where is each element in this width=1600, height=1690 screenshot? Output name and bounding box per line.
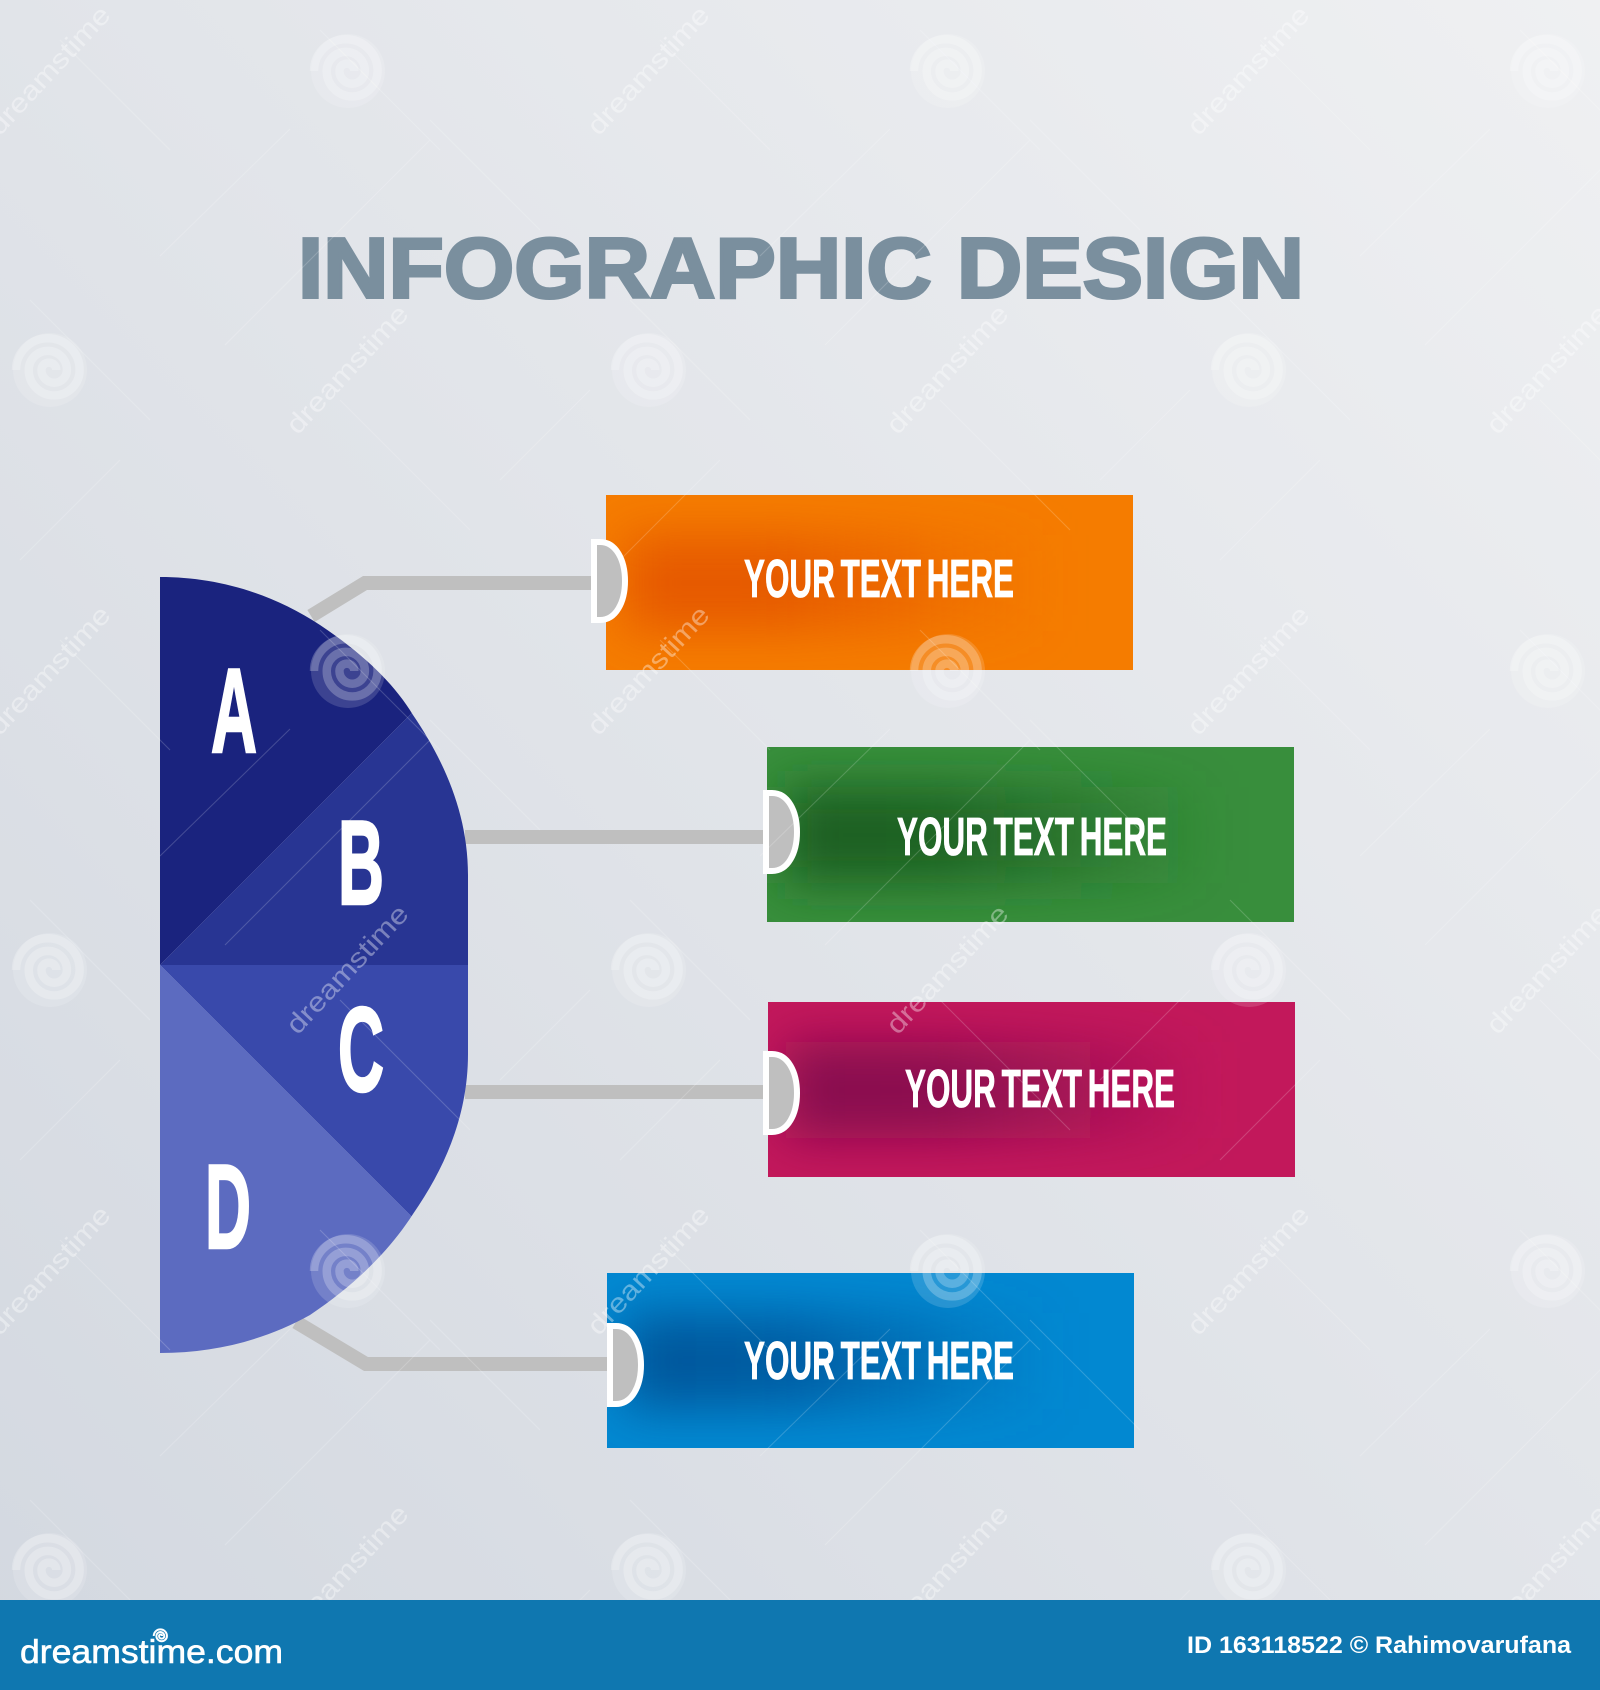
watermark overlay: dreamstime: [280, 899, 415, 1040]
watermark overlay: dreamstime: [880, 899, 1015, 1040]
watermark overlay: dreamstime: [581, 0, 716, 141]
watermark overlay: dreamstime: [1181, 600, 1316, 741]
panel: orange box: [606, 495, 1133, 670]
label text: YOUR TEXT HERE: [905, 1059, 1175, 1119]
icon: footer logo spiral: [154, 1629, 167, 1641]
letter A: A: [211, 644, 257, 778]
label text: YOUR TEXT HERE: [897, 807, 1167, 867]
label text: YOUR TEXT HERE: [744, 549, 1014, 609]
connector: D to blue box: [296, 1322, 620, 1364]
footer band: [0, 1600, 1600, 1690]
label text: YOUR TEXT HERE: [744, 1331, 1014, 1391]
panel: green box: [767, 747, 1294, 922]
connector: A to orange box: [311, 583, 600, 616]
watermark overlay: dreamstime: [1480, 1499, 1600, 1640]
letter D: D: [205, 1140, 251, 1274]
semicircle diagram: [160, 570, 470, 1360]
watermark overlay: dreamstime: [880, 1499, 1015, 1640]
icon: orange connector cap: [594, 542, 625, 620]
segment A: [160, 577, 412, 965]
segment D: [160, 965, 412, 1353]
watermark overlay: dreamstime: [1181, 0, 1316, 141]
watermark overlay: dreamstime: [280, 1499, 415, 1640]
footer logo: dreamstime.com: [20, 1633, 283, 1670]
icon: green connector cap: [766, 793, 797, 871]
segment C: [160, 965, 468, 1216]
letter C: C: [338, 983, 384, 1117]
watermark overlay: dreamstime: [1181, 1200, 1316, 1341]
watermark overlay: dreamstime: [581, 600, 716, 741]
icon: blue connector cap: [610, 1326, 641, 1404]
watermark overlay: dreamstime: [280, 299, 415, 440]
connector: C to crimson box: [465, 1085, 775, 1099]
footer credit: ID 163118522 © Rahimovarufana: [1187, 1632, 1572, 1659]
watermark overlay: dreamstime: [1480, 299, 1600, 440]
watermark overlay: dreamstime: [1480, 899, 1600, 1040]
connector: B to green box: [465, 830, 775, 844]
watermark overlay: dreamstime: [581, 1200, 716, 1341]
letter B: B: [338, 796, 384, 930]
segment B: [160, 713, 468, 965]
icon: crimson connector cap: [766, 1054, 797, 1132]
panel: blue box: [607, 1273, 1134, 1448]
watermark overlay: dreamstime: [880, 299, 1015, 440]
panel: crimson box: [768, 1002, 1295, 1177]
title: INFOGRAPHIC DESIGN: [298, 222, 1304, 316]
